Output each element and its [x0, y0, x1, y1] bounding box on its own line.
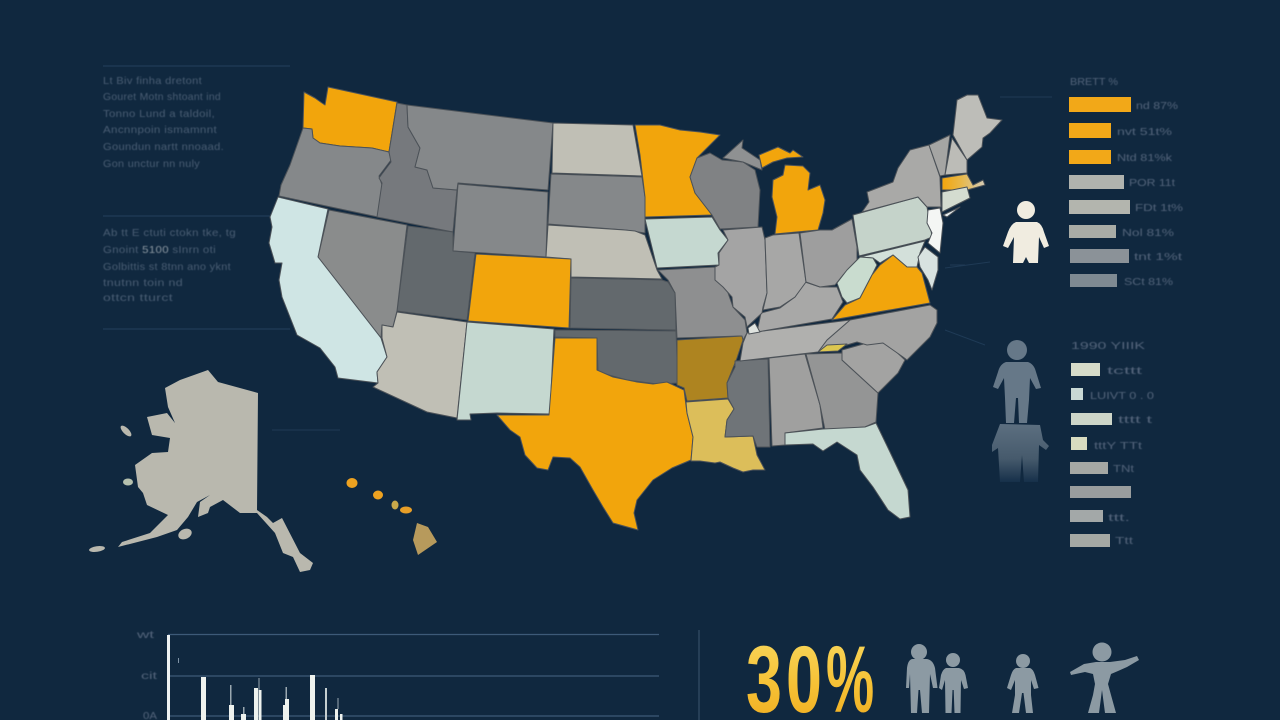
- bar labels: TNt: [1113, 463, 1134, 475]
- state: Missouri: [658, 267, 747, 340]
- state: Delaware and Delmarva: [918, 247, 938, 290]
- state: Utah: [397, 226, 475, 320]
- bar labels: [1090, 365, 1154, 547]
- icon: faded person reflection: [992, 424, 1049, 482]
- state: South Carolina: [842, 343, 905, 393]
- icon: tall person: [906, 644, 938, 713]
- state: North Dakota: [552, 123, 642, 176]
- state: Alabama: [769, 354, 823, 446]
- state: Nebraska: [546, 225, 662, 279]
- state: Colorado: [468, 254, 571, 328]
- state: New Mexico: [457, 322, 554, 420]
- bar labels: [1117, 100, 1183, 288]
- state: New Hampshire: [945, 138, 967, 175]
- state: Montana: [407, 105, 553, 190]
- state: Michigan lower peninsula: [772, 165, 825, 234]
- state: small pale patch: [748, 323, 760, 334]
- bar labels: Ntd 81%k: [1117, 152, 1173, 164]
- bar labels: tttt t: [1118, 414, 1152, 426]
- state: Indiana: [763, 233, 806, 310]
- state: Nevada: [318, 210, 407, 338]
- state: Connecticut and Rhode Island: [942, 187, 970, 212]
- state: Oregon: [279, 128, 391, 217]
- bar labels: tttY TTt: [1094, 440, 1142, 452]
- panel: middle-left text block: [103, 216, 290, 329]
- text: first paragraph: Tonno Lund a taldoil,: [103, 108, 215, 120]
- legend: lower-right ranking bars: [1070, 340, 1154, 547]
- state: Georgia: [806, 353, 878, 430]
- state: Virginia: [832, 255, 930, 320]
- legend title: BRETT %: [1070, 76, 1118, 88]
- bar labels: POR 11t: [1129, 177, 1175, 189]
- state: Mississippi: [725, 359, 770, 447]
- state: Wisconsin: [690, 153, 760, 229]
- legend: top-right ranking bars: [1069, 76, 1183, 288]
- state: South Dakota: [548, 174, 645, 233]
- state: New York: [862, 145, 941, 212]
- state: Texas: [497, 338, 693, 530]
- text: second paragraph: Golbittis st 8tnn ano yknt: [103, 261, 231, 273]
- text: first paragraph: Lt Biv finha dretont: [103, 75, 202, 87]
- bar labels: ttt.: [1108, 512, 1130, 524]
- map: Alaska: [89, 370, 313, 572]
- state: Louisiana: [686, 399, 765, 472]
- text: first paragraph: Ancnnpoin ismamnnt: [103, 124, 217, 136]
- state: Idaho: [377, 103, 457, 232]
- text: second paragraph: ottcn tturct: [103, 292, 173, 304]
- text: second paragraph: tnutnn toin nd: [103, 277, 183, 289]
- chart: bottom bar chart: [135, 629, 659, 720]
- bar labels: tnt 1%t: [1134, 251, 1182, 263]
- bar labels: Nol 81%: [1122, 227, 1174, 239]
- big stat: 30%: [746, 627, 874, 720]
- text: second paragraph: [103, 227, 236, 304]
- state: North Carolina: [818, 305, 937, 360]
- state: Vermont: [929, 135, 950, 176]
- text: first paragraph: Goundun nartt nnoaad.: [103, 141, 224, 153]
- state: Kansas: [570, 278, 676, 330]
- bars: [1070, 363, 1131, 547]
- text: first paragraph: Gon unctur nn nuly: [103, 158, 200, 170]
- state: Kentucky: [757, 282, 843, 332]
- state: Michigan upper peninsula: [759, 147, 803, 168]
- state: Oklahoma: [555, 330, 678, 384]
- state: Wyoming: [453, 184, 548, 257]
- bar labels: nvt 51t%: [1117, 126, 1172, 138]
- bar labels: LUIVT 0 . 0: [1090, 390, 1154, 402]
- bar labels: nd 87%: [1136, 100, 1178, 112]
- map: contiguous United States: [269, 87, 1002, 530]
- state: Maryland: [860, 241, 925, 267]
- bars: [1069, 97, 1131, 287]
- state: Ohio: [800, 219, 857, 287]
- state: West Virginia: [837, 257, 877, 303]
- icon: grey person: [993, 340, 1041, 423]
- bar labels: SCt 81%: [1124, 276, 1173, 288]
- state: Arizona: [373, 312, 467, 418]
- state: Wisconsin north sliver: [723, 140, 762, 170]
- state: Iowa: [645, 217, 728, 268]
- state: Massachusetts: [942, 174, 985, 190]
- bar labels: FDt 1t%: [1135, 202, 1183, 214]
- state: Florida: [785, 423, 910, 519]
- text: second paragraph: Ab tt E ctuti ctokn tke, tg: [103, 227, 236, 239]
- icon: person with outstretched arms: [1070, 642, 1139, 713]
- state: Pennsylvania: [853, 197, 932, 256]
- text: second paragraph: Gnoint 5100 sInrn oti: [103, 244, 216, 256]
- decorative leader lines: [272, 97, 1052, 430]
- y axis: [167, 635, 170, 720]
- state: New Jersey: [927, 208, 943, 253]
- state: Tennessee: [740, 320, 850, 361]
- state: Illinois: [715, 227, 767, 327]
- grid lines: [168, 634, 659, 716]
- bars: [178, 658, 342, 720]
- icon: white person: [1003, 201, 1049, 263]
- icon: third person: [1007, 654, 1038, 713]
- state: Maine: [953, 95, 1002, 160]
- legend title: 1990 YIIIK: [1071, 340, 1145, 352]
- y axis labels: wt: [135, 629, 154, 641]
- map: Hawaii: [346, 478, 437, 555]
- state: Arkansas: [677, 336, 743, 401]
- icon: second person: [939, 653, 968, 713]
- state: Tennessee sliver: [818, 344, 847, 352]
- text: first paragraph: [103, 75, 224, 170]
- panel: top-left text block: [103, 66, 290, 170]
- bar labels: tcttt: [1107, 365, 1142, 377]
- y axis labels: cit: [141, 670, 157, 682]
- icon group: four people: [906, 642, 1139, 713]
- state: Long Island: [943, 207, 960, 217]
- bar labels: Ttt: [1115, 535, 1133, 547]
- y axis labels: [135, 629, 157, 720]
- state: Minnesota: [635, 125, 720, 217]
- divider: [698, 630, 700, 720]
- text: first paragraph: Gouret Motn shtoant ind: [103, 91, 221, 103]
- state: California: [269, 197, 387, 383]
- state: Washington: [303, 87, 397, 152]
